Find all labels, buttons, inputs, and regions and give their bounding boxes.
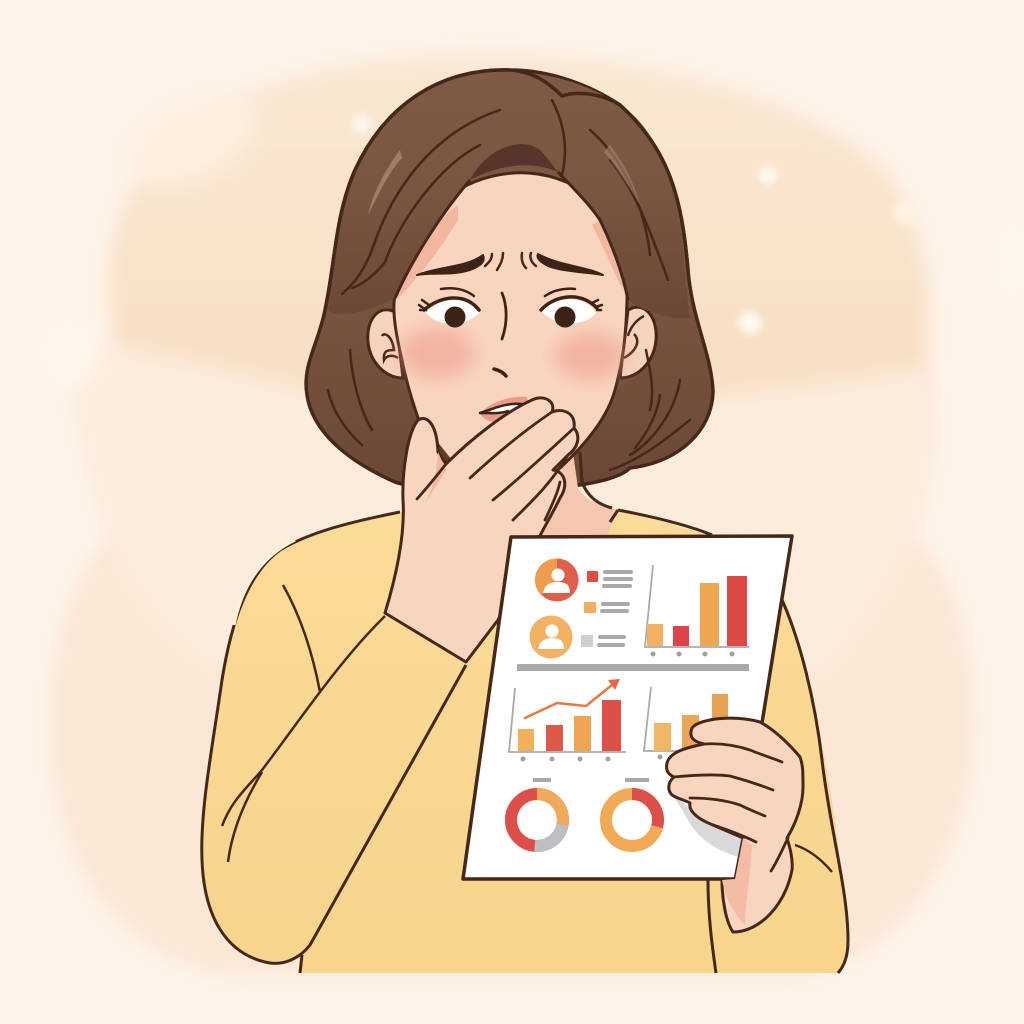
profile avatar 1 — [535, 558, 578, 602]
nose — [494, 293, 506, 376]
profile avatar 2 — [530, 616, 572, 658]
neck — [470, 445, 618, 560]
cheek blush left — [399, 327, 475, 379]
legend — [581, 570, 633, 647]
right eyebrow — [537, 254, 603, 275]
trend arrow — [525, 679, 620, 718]
right hand holding paper — [667, 718, 803, 932]
hair gap beside thumb — [436, 440, 452, 472]
right eye — [541, 289, 602, 328]
hair back — [306, 70, 713, 490]
left eye — [419, 288, 480, 328]
sweater body — [202, 510, 848, 973]
bar chart 2 with arrow — [509, 679, 626, 762]
donut chart 2 — [606, 778, 658, 846]
forehead wrinkles — [485, 253, 536, 270]
mouth — [480, 397, 530, 422]
face — [394, 173, 627, 492]
left eyebrow — [417, 255, 484, 275]
ears — [368, 307, 656, 378]
donut chart 1 — [511, 778, 563, 846]
divider bar — [517, 664, 749, 671]
bar chart 3 — [644, 687, 728, 760]
hand shadow on paper — [668, 790, 743, 857]
paper report — [463, 536, 792, 879]
hair front — [325, 70, 690, 470]
cheek blush right — [554, 332, 626, 380]
bar chart 1 — [645, 565, 749, 656]
hair strands — [328, 100, 690, 470]
left hand covering mouth — [385, 398, 578, 662]
